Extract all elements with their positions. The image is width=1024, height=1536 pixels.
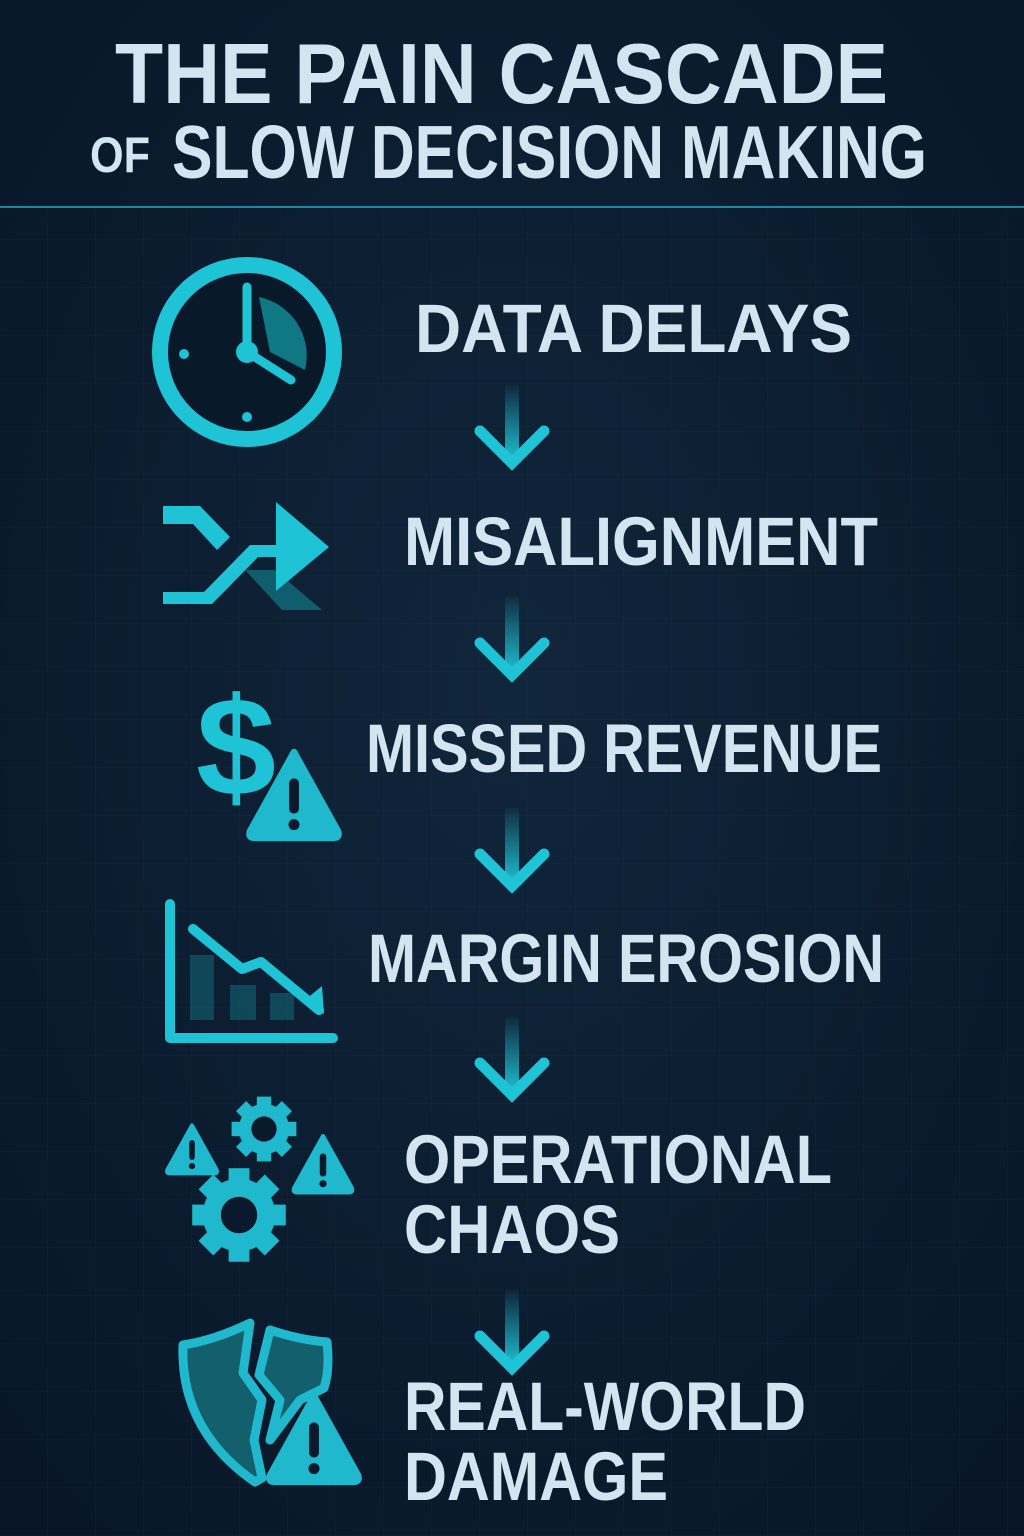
- icon: shuffle: [163, 502, 329, 610]
- title: [90, 27, 927, 194]
- heading: operational chaos: OPERATIONAL: [404, 1121, 832, 1198]
- arrow 3: [480, 808, 544, 886]
- arrow 1: [480, 385, 544, 463]
- title: OF: [90, 127, 150, 183]
- heading: data delays: DATA DELAYS: [415, 290, 852, 367]
- icon: dollar warning: [196, 668, 339, 838]
- heading: misalignment: MISALIGNMENT: [404, 503, 878, 580]
- title: THE PAIN CASCADE: [115, 27, 888, 122]
- icon: clock: [160, 265, 334, 439]
- icon: dollar warning: $: [196, 668, 276, 825]
- heading: real-world damage: DAMAGE: [404, 1438, 668, 1515]
- icon: gears and warnings: [167, 1097, 352, 1262]
- icon: declining chart: [170, 904, 333, 1038]
- heading: operational chaos: CHAOS: [404, 1191, 620, 1268]
- heading: operational chaos: [404, 1121, 832, 1268]
- heading: missed revenue: MISSED REVENUE: [366, 710, 882, 787]
- arrow 2: [480, 597, 544, 675]
- heading: margin erosion: MARGIN EROSION: [368, 920, 884, 997]
- icon: broken shield warning: [183, 1323, 359, 1482]
- heading: real-world damage: [404, 1368, 806, 1515]
- heading: real-world damage: REAL-WORLD: [404, 1368, 806, 1445]
- arrow 4: [480, 1017, 544, 1095]
- arrow 5: [480, 1290, 544, 1368]
